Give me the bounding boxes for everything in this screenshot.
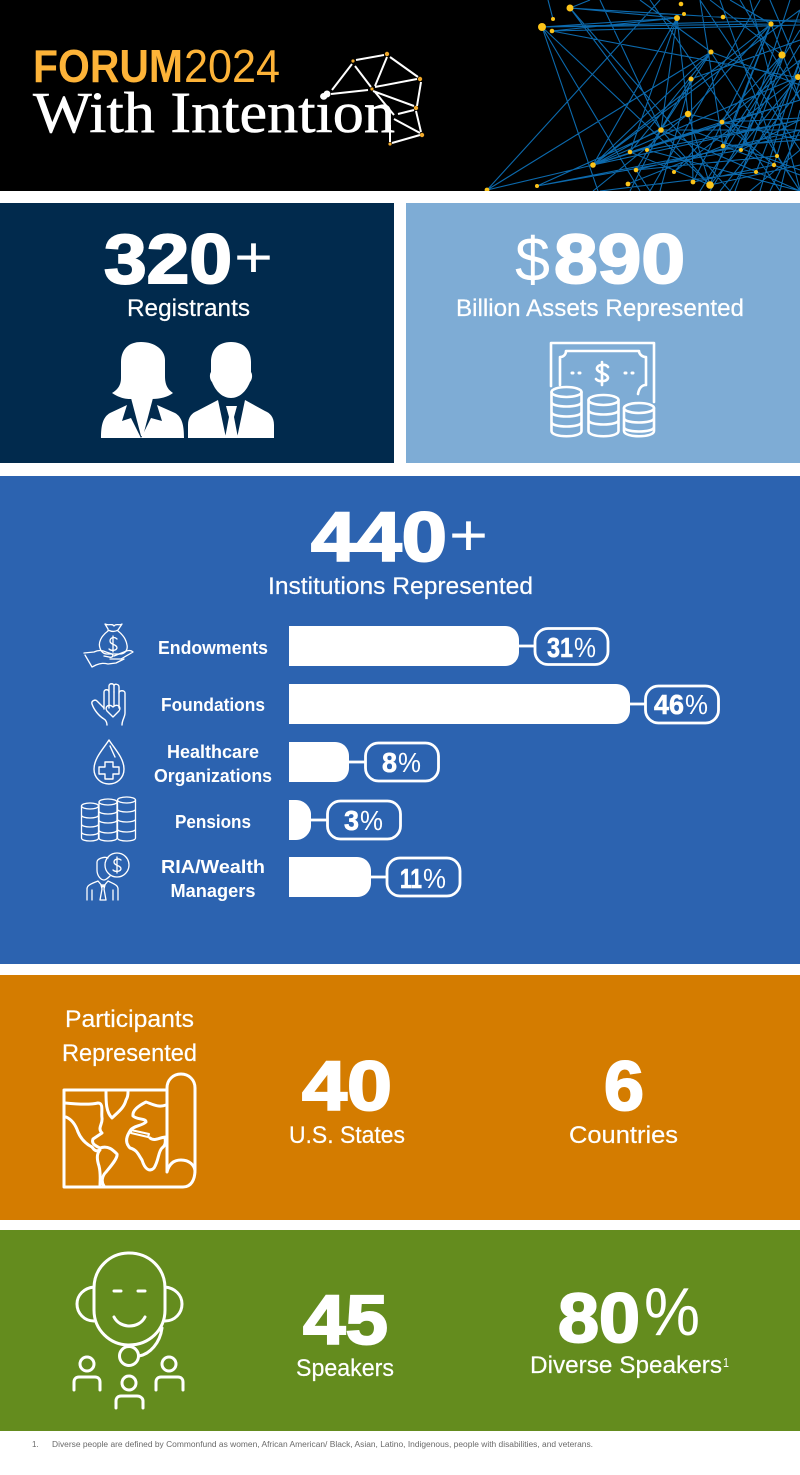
panel: assets	[406, 203, 800, 463]
footnote: Diverse people are defined by Commonfund as women, African American/ Black, Asian, Latino, Indigenous, people with disabilities, and veterans.	[52, 1440, 593, 1449]
stat: 80% diverse speakers: 80	[558, 1279, 640, 1357]
title: Forum 2024: 2024	[184, 40, 280, 92]
bar: 46%	[289, 684, 630, 724]
panel: institutions	[0, 476, 800, 964]
callout: 11%: 11	[400, 863, 422, 894]
panel: speakers	[0, 1230, 800, 1431]
stat: 440+	[311, 498, 488, 576]
label: RIA/Wealth Managers	[161, 857, 265, 901]
row: RIA / wealth managers	[87, 853, 460, 901]
label: institutions represented: Institutions Represented	[268, 573, 533, 600]
row: pensions	[82, 797, 400, 841]
callout: 31%: 31	[547, 632, 573, 663]
icon: money bag in hand	[84, 624, 133, 667]
stat: 45 speakers: Speakers	[296, 1355, 394, 1382]
callout: 46%	[630, 686, 718, 723]
title: Forum 2024	[33, 40, 280, 92]
icon: coin stacks	[82, 797, 136, 841]
row: healthcare	[94, 740, 438, 786]
panel: registrants	[0, 203, 394, 463]
callout: 11%	[371, 858, 460, 896]
stat: 320+: +	[234, 225, 273, 290]
callout: 3%	[311, 801, 400, 839]
label: RIA/Wealth Managers: Managers	[170, 881, 256, 901]
stat: $890: $	[515, 226, 550, 295]
icon: drop with cross	[94, 740, 124, 784]
callout: 8%	[349, 743, 438, 781]
icon: hand with heart	[92, 684, 125, 725]
label: healthcare organizations: Healthcare	[167, 742, 259, 762]
label: RIA/Wealth Managers: RIA/Wealth	[161, 857, 265, 877]
title: With Intention: With Intention	[33, 80, 395, 145]
label: foundations: Foundations	[161, 695, 265, 715]
stat: 80% diverse speakers: Diverse Speakers	[530, 1352, 722, 1379]
footnote: 1.	[32, 1440, 39, 1449]
callout: 46%: %	[685, 689, 708, 720]
bar: 8%	[289, 742, 349, 782]
stat: 80% diverse speakers	[530, 1274, 729, 1379]
stat: 440+: 440	[311, 498, 447, 576]
logo network	[324, 52, 424, 146]
bar: 31%	[289, 626, 519, 666]
stat: 40 U.S. states	[289, 1047, 405, 1149]
callout: 31%	[519, 628, 608, 664]
label: healthcare organizations	[154, 742, 272, 786]
stat: 45 speakers	[296, 1281, 394, 1382]
row: foundations	[92, 684, 718, 725]
heading: participants represented: Participants	[65, 1006, 194, 1033]
label: registrants: Registrants	[127, 295, 250, 322]
stat: 45 speakers: 45	[303, 1281, 388, 1359]
icon: speaker with audience	[74, 1253, 183, 1408]
stat: 80% diverse speakers: 1	[723, 1355, 729, 1370]
bar: 3%	[289, 800, 311, 840]
stat: 40 U.S. states: U.S. States	[289, 1122, 405, 1149]
heading: participants represented: Represented	[62, 1040, 197, 1067]
network graphic	[485, 0, 800, 192]
title: Forum 2024: FORUM	[33, 40, 183, 92]
heading: participants represented	[62, 1006, 197, 1067]
panel: header	[0, 0, 800, 192]
stat: 440+: +	[449, 503, 488, 568]
stat: 320+	[104, 220, 273, 298]
callout: 11%: %	[423, 863, 446, 894]
icon: world map scroll	[64, 1074, 195, 1187]
callout: 46%: 46	[654, 689, 684, 720]
stat: 6 countries: Countries	[569, 1122, 678, 1149]
stat: 6 countries: 6	[604, 1047, 644, 1125]
stat: $890	[515, 220, 685, 298]
label: healthcare organizations: Organizations	[154, 766, 272, 786]
stat: 6 countries	[569, 1047, 678, 1149]
panel: participants	[0, 975, 800, 1220]
label: pensions: Pensions	[175, 812, 251, 832]
callout: 3%: %	[360, 805, 383, 836]
callout: 8%: 8	[382, 747, 397, 778]
bar: 11%	[289, 857, 371, 897]
stat: 320+: 320	[104, 220, 232, 298]
label: billion assets: Billion Assets Represented	[456, 295, 744, 322]
callout: 3%: 3	[344, 805, 359, 836]
stat: 40 U.S. states: 40	[302, 1047, 392, 1125]
stat: $890: 890	[554, 220, 685, 298]
icon: woman and man	[101, 342, 274, 438]
row: endowments	[84, 624, 608, 667]
stat: 80% diverse speakers: %	[644, 1274, 700, 1350]
label: endowments: Endowments	[158, 638, 268, 658]
icon: banknote and coins	[551, 343, 654, 436]
callout: 31%: %	[574, 632, 596, 663]
callout: 8%: %	[398, 747, 421, 778]
icon: advisor with dollar coin	[87, 853, 129, 900]
